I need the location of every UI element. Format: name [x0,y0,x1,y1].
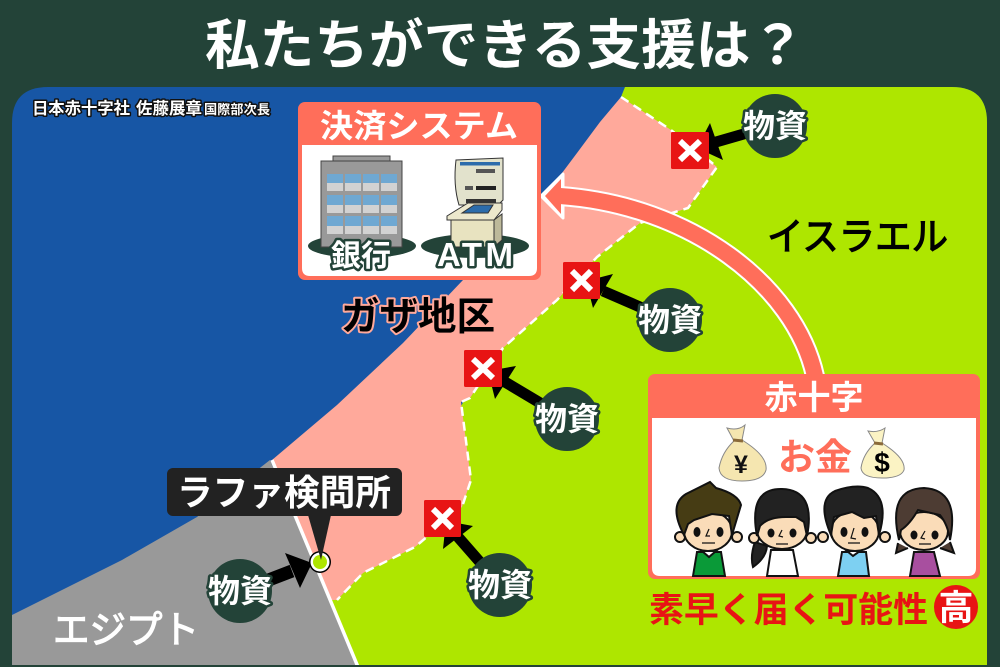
label: israel: イスラエル [767,217,948,259]
rafah callout [167,468,402,560]
checkpoint marker [309,551,331,573]
high badge: 高 [938,589,974,628]
supply label: 物資 [638,302,702,338]
arrow [586,274,670,320]
arrow [443,521,500,585]
blocked route 3 [464,350,599,451]
icon: ground ellipse bank [308,234,416,258]
supply circle [468,553,532,617]
gaza border [337,97,717,600]
egypt [12,460,358,667]
supply circle [638,288,702,352]
blocked mark [563,262,600,299]
label: egypt: エジプト [53,610,199,652]
panel: red cross [648,374,980,579]
supply circle [743,94,807,158]
label: money: お金 [778,437,852,478]
blocked mark [464,350,502,387]
panel: payment system [298,102,541,280]
arrow [488,366,567,419]
icon: dollar money bag [861,428,904,478]
supply circle [535,387,599,451]
gaza strip [272,97,717,600]
blocked mark [671,132,709,169]
icon: bank building [321,156,402,247]
label: gaza: ガザ地区 [341,296,495,339]
conclusion text: 素早く届く可能性 [649,591,928,630]
israel land [320,87,987,667]
arrow: red cross funds to payment system [541,174,815,376]
supply label: 物資 [535,401,599,437]
person 1 [675,482,742,576]
title: 私たちができる支援は？ [205,16,805,76]
blocked route 2 [563,262,702,352]
label: bank: 銀行 [331,240,391,273]
heading: red cross: 赤十字 [764,379,864,416]
rafah callout: ラファ検問所 [177,472,391,513]
person 2 [749,489,816,576]
icon: atm machine [447,158,503,247]
person 4 [896,488,954,576]
label: atm: ATM [437,236,513,273]
blocked route 1 [671,94,807,169]
speaker credit: 佐藤展章 [136,99,202,118]
arrow [697,123,775,160]
supply label: 物資 [743,108,807,144]
rafah route [167,468,402,623]
icon: yen money bag: ¥ [734,451,748,479]
person 3 [818,487,890,576]
blocked route 4 [424,500,532,617]
arrow [240,553,312,591]
supply label: 物資 [208,573,272,609]
egypt border [272,460,358,667]
heading: payment system: 決済システム [320,108,518,144]
blocked mark [424,500,461,537]
icon: dollar money bag: $ [874,447,890,478]
supply circle [208,559,272,623]
icon: ground ellipse atm [421,234,529,258]
icon: yen money bag [719,425,766,481]
speaker credit: 日本赤十字社 [32,99,130,118]
speaker credit: 国際部次長 [204,101,270,117]
speaker credit [32,99,270,118]
supply label: 物資 [468,567,532,603]
